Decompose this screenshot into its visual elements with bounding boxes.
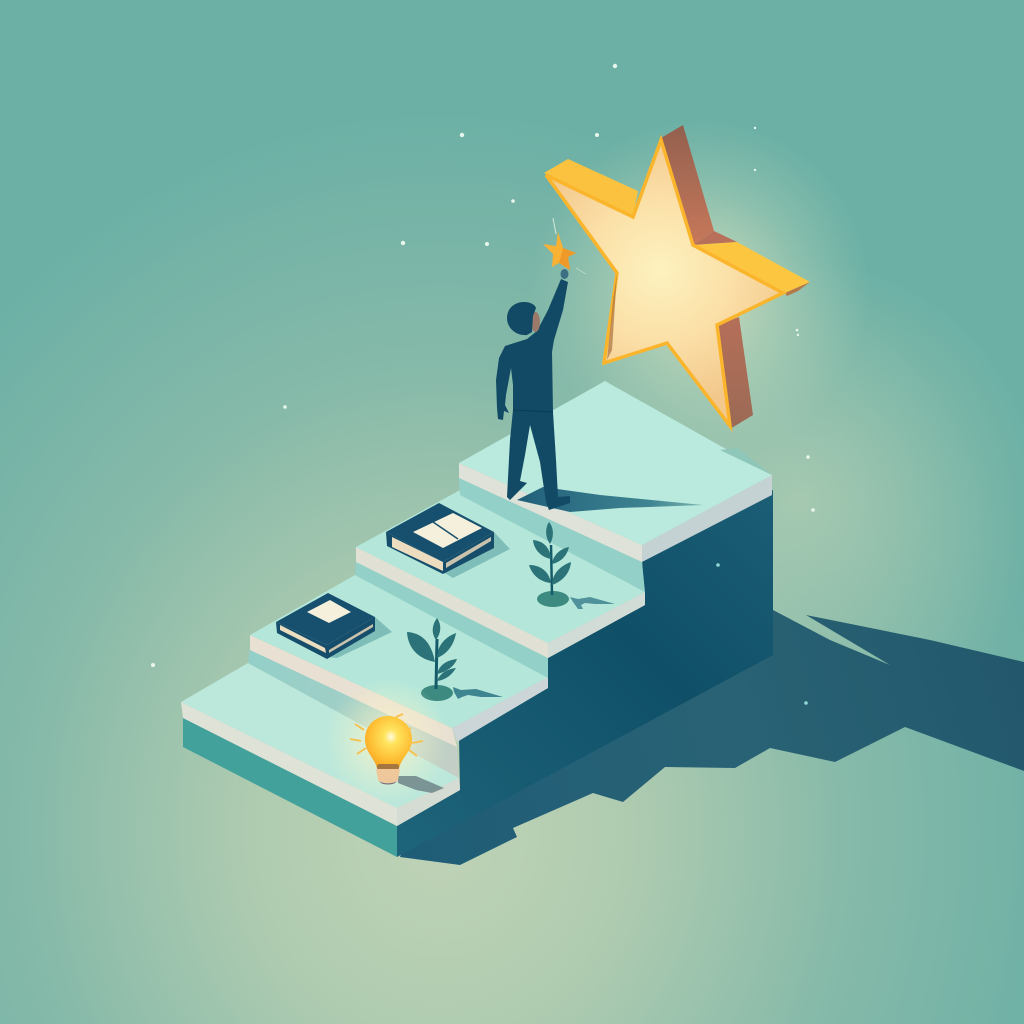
- small star held by the person: [543, 218, 586, 274]
- body: [496, 279, 570, 510]
- ground shadow: [400, 610, 1024, 865]
- bulb shadow: [398, 776, 444, 793]
- plant shadow: [453, 687, 503, 699]
- face: [531, 312, 540, 332]
- book shadow: [327, 617, 392, 658]
- sparkles: [151, 64, 815, 667]
- head: [507, 302, 536, 335]
- step 1: [181, 663, 460, 857]
- big 3D star: [544, 125, 810, 429]
- light bulb: [326, 678, 450, 802]
- person reaching up: [496, 269, 570, 510]
- step 2: [248, 575, 548, 778]
- bulb rays: [350, 714, 423, 756]
- bulb glow: [326, 678, 450, 802]
- plant on step 2: [407, 618, 503, 701]
- hand: [560, 269, 568, 279]
- book 1 on step 2: [276, 593, 392, 659]
- step 4: [459, 381, 772, 592]
- star front face: [546, 140, 783, 426]
- step 3: [355, 490, 645, 678]
- staircase: [181, 381, 773, 857]
- book shadow: [443, 532, 510, 578]
- star extrusion: [544, 125, 810, 429]
- book 2 on step 3: [386, 503, 510, 578]
- staircase dark side wall: [397, 490, 773, 857]
- sparkle on staircase wall: [716, 563, 808, 705]
- plant on step 3: [529, 522, 615, 609]
- plant shadow: [570, 597, 615, 609]
- person shadow: [517, 487, 703, 512]
